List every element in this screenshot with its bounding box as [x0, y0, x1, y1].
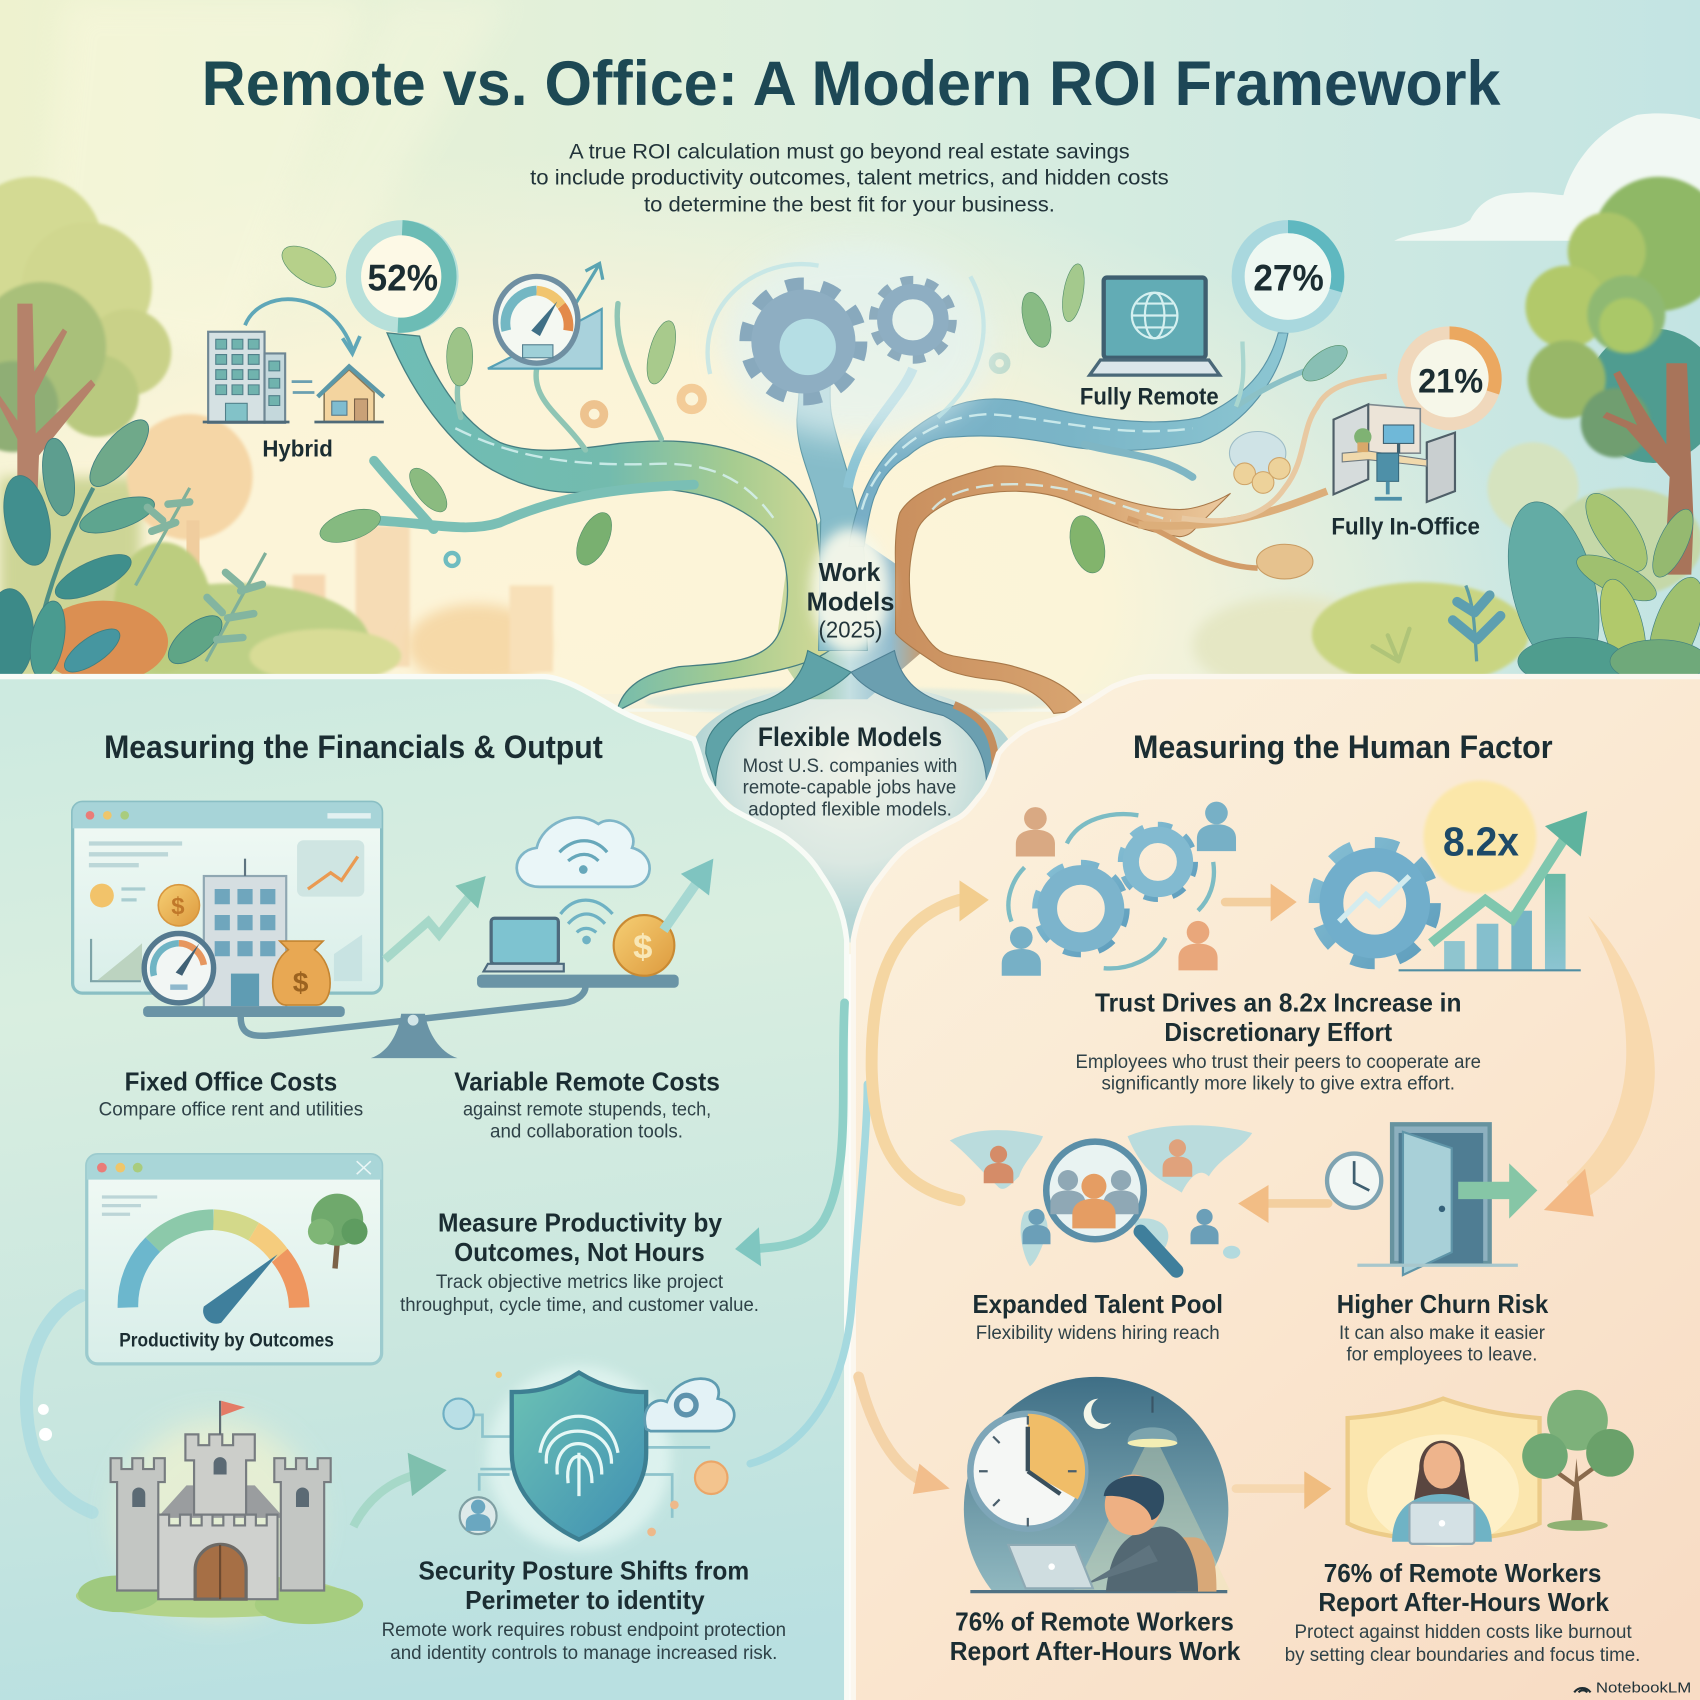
- heading: trust drives: Trust Drives an 8.2x Increase in: [1095, 988, 1461, 1018]
- scenery: right: [1193, 177, 1700, 694]
- icon: money bag: $: [293, 966, 309, 998]
- label: work models: Work: [819, 557, 881, 587]
- scenery: left: [0, 177, 553, 696]
- icon: building to house: [203, 299, 384, 423]
- sprigs: [136, 488, 266, 661]
- icon: after-hours worker: [964, 1376, 1228, 1594]
- icon: wifi cloud: [517, 817, 650, 944]
- text: flexible models: remote-capable jobs have: [743, 777, 956, 799]
- background bushes: [1193, 442, 1700, 694]
- heading: variable remote costs: and collaboration tools.: [490, 1120, 683, 1142]
- heading: fixed office costs: Fixed Office Costs: [125, 1067, 337, 1097]
- roots: [706, 651, 851, 786]
- label: fully remote: Fully Remote: [1080, 383, 1219, 410]
- teal ribbons: [26, 1003, 867, 1512]
- right blue limb: [849, 333, 1288, 546]
- icon: coin and gauge: [144, 885, 214, 1003]
- heading: after-hours right: 76% of Remote Workers: [1324, 1558, 1601, 1588]
- heading: variable remote costs: [454, 1067, 720, 1142]
- heading: measure productivity: throughput, cycle time, and customer value.: [400, 1294, 759, 1316]
- heading: after-hours left: 76% of Remote Workers: [955, 1607, 1234, 1637]
- heading: after-hours right: by setting clear boundaries and focus time.: [1285, 1644, 1640, 1666]
- heading: higher churn risk: for employees to leave.: [1347, 1344, 1537, 1366]
- heading: fixed office costs: Compare office rent and utilities: [99, 1099, 363, 1121]
- icon: coin: $: [633, 928, 652, 966]
- heading: measure productivity: Outcomes, Not Hours: [454, 1237, 705, 1267]
- left twigs: [457, 304, 661, 450]
- ring: 21% office: [1404, 333, 1495, 424]
- ring: 27% remote: [1238, 227, 1338, 326]
- heading: after-hours left: [950, 1607, 1241, 1666]
- heading: security posture: Remote work requires robust endpoint protection: [382, 1619, 786, 1641]
- heading: trust drives: Discretionary Effort: [1164, 1017, 1392, 1047]
- subtitle: [530, 138, 1169, 216]
- blue sprig: [1373, 585, 1501, 661]
- heading: higher churn risk: [1337, 1289, 1549, 1366]
- orange flow arrows: [859, 880, 1655, 1509]
- heading: security posture: Security Posture Shifts from: [418, 1556, 749, 1586]
- heading: higher churn risk: It can also make it easier: [1339, 1322, 1545, 1344]
- ground ripple: [607, 709, 1095, 712]
- subtitle: to include productivity outcomes, talent metrics, and hidden costs: [530, 164, 1169, 189]
- heading: expanded talent pool: Expanded Talent Pool: [973, 1289, 1223, 1319]
- heading: variable remote costs: Variable Remote Costs: [454, 1067, 720, 1097]
- subtitle: A true ROI calculation must go beyond real estate savings: [569, 138, 1130, 163]
- icon: 8.2x gear and chart: [1317, 781, 1587, 970]
- icon: team gears: [1002, 802, 1236, 976]
- icon: data cluster: [1229, 432, 1290, 493]
- center column: [797, 379, 867, 651]
- foreground leaves: [1508, 493, 1700, 674]
- left lower branch: [374, 461, 694, 529]
- title: Remote vs. Office: A Modern ROI Framework: [202, 49, 1502, 119]
- label: work models: [807, 557, 894, 642]
- leaves: [275, 238, 1353, 577]
- heading: after-hours right: Report After-Hours Work: [1318, 1587, 1609, 1617]
- icon: 8.2x gear and chart: 8.2x: [1443, 818, 1519, 864]
- background haze: [0, 414, 553, 686]
- label: work models: Models: [807, 586, 894, 616]
- subtitle: to determine the best fit for your business.: [644, 191, 1055, 216]
- icon: growing tree: [1522, 1390, 1634, 1531]
- panel: human factor: [853, 677, 1700, 1700]
- watermark: notebooklm: NotebookLM: [1596, 1679, 1691, 1696]
- heading: after-hours left: Report After-Hours Work: [950, 1636, 1241, 1666]
- icon: small tree: [308, 1194, 368, 1268]
- window: productivity gauge: [87, 1155, 382, 1364]
- window: productivity gauge: Productivity by Outcomes: [119, 1330, 334, 1352]
- label: fully in-office: Fully In-Office: [1331, 514, 1480, 541]
- heading: after-hours right: [1285, 1558, 1640, 1666]
- label: hybrid: Hybrid: [262, 435, 333, 461]
- icon: orange leaf cluster: [1257, 544, 1313, 579]
- icon: world talent search: [950, 1125, 1252, 1271]
- panel: financials: [0, 677, 847, 1700]
- heading: fixed office costs: [99, 1067, 363, 1121]
- heading: measure productivity: Measure Productivity by: [438, 1208, 723, 1238]
- heading: trust drives: significantly more likely to give extra effort.: [1102, 1073, 1455, 1095]
- arrow: remote growth: [664, 859, 713, 930]
- heading: security posture: and identity controls to manage increased risk.: [390, 1642, 777, 1664]
- left tree foliage: [0, 177, 171, 452]
- heading: flexible models: Flexible Models: [758, 721, 942, 752]
- right tree: [1525, 177, 1700, 575]
- small decorative gears: [584, 404, 604, 424]
- orange boulder: [54, 600, 168, 674]
- branch data lines: [455, 414, 1193, 520]
- icon: castle: [76, 1401, 363, 1624]
- icon: exit door: [1327, 1124, 1537, 1275]
- tree: work models: [275, 238, 1387, 943]
- icon: laptop globe: [1090, 278, 1220, 375]
- heading: human factor: Measuring the Human Factor: [1133, 729, 1553, 765]
- trunk: [775, 520, 924, 699]
- icon: money bag: [273, 941, 330, 1005]
- arrow: zigzag growth: [385, 876, 486, 960]
- ring: 52% hybrid: [353, 228, 451, 325]
- green bushes: [114, 540, 402, 674]
- heading: after-hours right: Protect against hidden costs like burnout: [1295, 1621, 1632, 1643]
- heading: trust drives: Employees who trust their peers to cooperate are: [1076, 1051, 1481, 1073]
- icon: protected worker: [1348, 1390, 1634, 1547]
- arrow: castle to shield: [353, 1453, 447, 1527]
- trunk glow: [811, 528, 889, 654]
- text: flexible models: adopted flexible models.: [748, 798, 952, 820]
- gears: center: [708, 244, 992, 439]
- icon: office cubicle: [1334, 404, 1455, 502]
- heading: measure productivity: Track objective metrics like project: [436, 1271, 724, 1293]
- top background: [0, 0, 1700, 954]
- pocket background: [694, 683, 1008, 943]
- icon: coin and gauge: $: [171, 893, 185, 920]
- ring: 21% office: 21%: [1418, 362, 1483, 400]
- icon: balance scale: [143, 975, 679, 1058]
- label: work models: (2025): [819, 616, 883, 642]
- heading: trust drives: [1076, 988, 1481, 1095]
- foreground leaves: [0, 411, 230, 681]
- heading: higher churn risk: Higher Churn Risk: [1337, 1289, 1549, 1319]
- text: flexible models: [743, 755, 957, 820]
- heading: financials: Measuring the Financials & Output: [104, 729, 603, 765]
- heading: measure productivity: [400, 1208, 759, 1316]
- icon: gauge and chart: [488, 263, 603, 369]
- ring: 52% hybrid: 52%: [368, 258, 438, 299]
- icon: office building: [204, 859, 286, 1008]
- cloud: top right: [1394, 113, 1700, 241]
- left limb: [387, 333, 829, 711]
- window: financial dashboard: [73, 802, 382, 993]
- heading: expanded talent pool: [973, 1289, 1223, 1344]
- flexible models text: [743, 721, 957, 820]
- left tree trunk: [0, 304, 96, 488]
- text: flexible models: Most U.S. companies with: [743, 755, 957, 777]
- icon: coin: [614, 915, 674, 976]
- ring: 27% remote: 27%: [1253, 258, 1324, 299]
- orange limb: [895, 466, 1231, 713]
- heading: variable remote costs: against remote stupends, tech,: [463, 1099, 711, 1121]
- icon: remote laptop: [484, 918, 564, 971]
- heading: security posture: [382, 1556, 786, 1664]
- heading: security posture: Perimeter to identity: [465, 1585, 705, 1615]
- heading: expanded talent pool: Flexibility widens hiring reach: [976, 1322, 1220, 1344]
- icon: identity shield: [443, 1366, 734, 1550]
